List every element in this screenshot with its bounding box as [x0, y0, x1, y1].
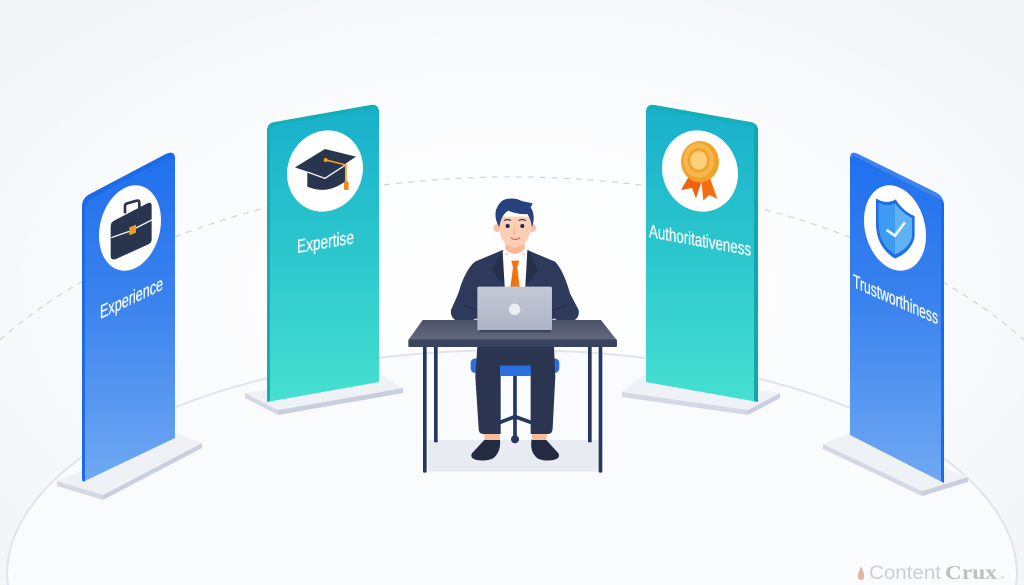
- icon circle: graduation cap: [287, 127, 363, 215]
- base: Authoritativeness: [622, 373, 780, 415]
- board: Experience: [82, 153, 175, 481]
- label: Trustworthiness: Trustworthiness: [853, 271, 938, 329]
- solid floor arc: [7, 350, 1017, 585]
- panel: Expertise: [245, 105, 403, 415]
- watermark: Content Crux: Content: [869, 563, 942, 584]
- head: [493, 198, 536, 261]
- watermark: Content Crux: [858, 562, 1004, 584]
- label: Expertise: Expertise: [297, 227, 354, 258]
- floor shadow: [428, 440, 598, 472]
- icon: briefcase: [111, 201, 152, 259]
- icon circle: shield: [864, 178, 926, 278]
- board: Expertise: [267, 105, 379, 402]
- icon: shield: [876, 198, 915, 259]
- shoes: [471, 439, 559, 461]
- base: Experience: [57, 433, 202, 500]
- icon: medal: [681, 141, 719, 201]
- back desk legs: [434, 347, 592, 442]
- jacket: [451, 250, 579, 327]
- icon circle: medal: [662, 127, 738, 215]
- panel: Experience: [57, 153, 202, 500]
- front desk legs: [423, 347, 602, 473]
- watermark: Content Crux: .ai: [999, 575, 1004, 581]
- dashed orbit arc: [0, 177, 1024, 340]
- trousers: [475, 347, 555, 434]
- label: Experience: Experience: [100, 273, 163, 324]
- panel: Authoritativeness: [622, 105, 780, 415]
- label: Authoritativeness: Authoritativeness: [649, 220, 751, 260]
- desk top: [408, 320, 617, 340]
- base: Trustworthiness: [823, 433, 968, 496]
- laptop: [477, 287, 552, 332]
- stool: [471, 358, 559, 443]
- shirt and tie: [503, 249, 527, 288]
- board: Trustworthiness: [850, 153, 944, 483]
- person at desk: [408, 198, 617, 473]
- icon circle: briefcase: [99, 178, 161, 278]
- hands: [472, 318, 558, 327]
- icon: graduation cap: [295, 149, 356, 190]
- base: Expertise: [245, 373, 403, 415]
- watermark: Content Crux: Crux: [945, 562, 997, 584]
- board: Authoritativeness: [646, 105, 758, 402]
- panel: Trustworthiness: [823, 153, 968, 496]
